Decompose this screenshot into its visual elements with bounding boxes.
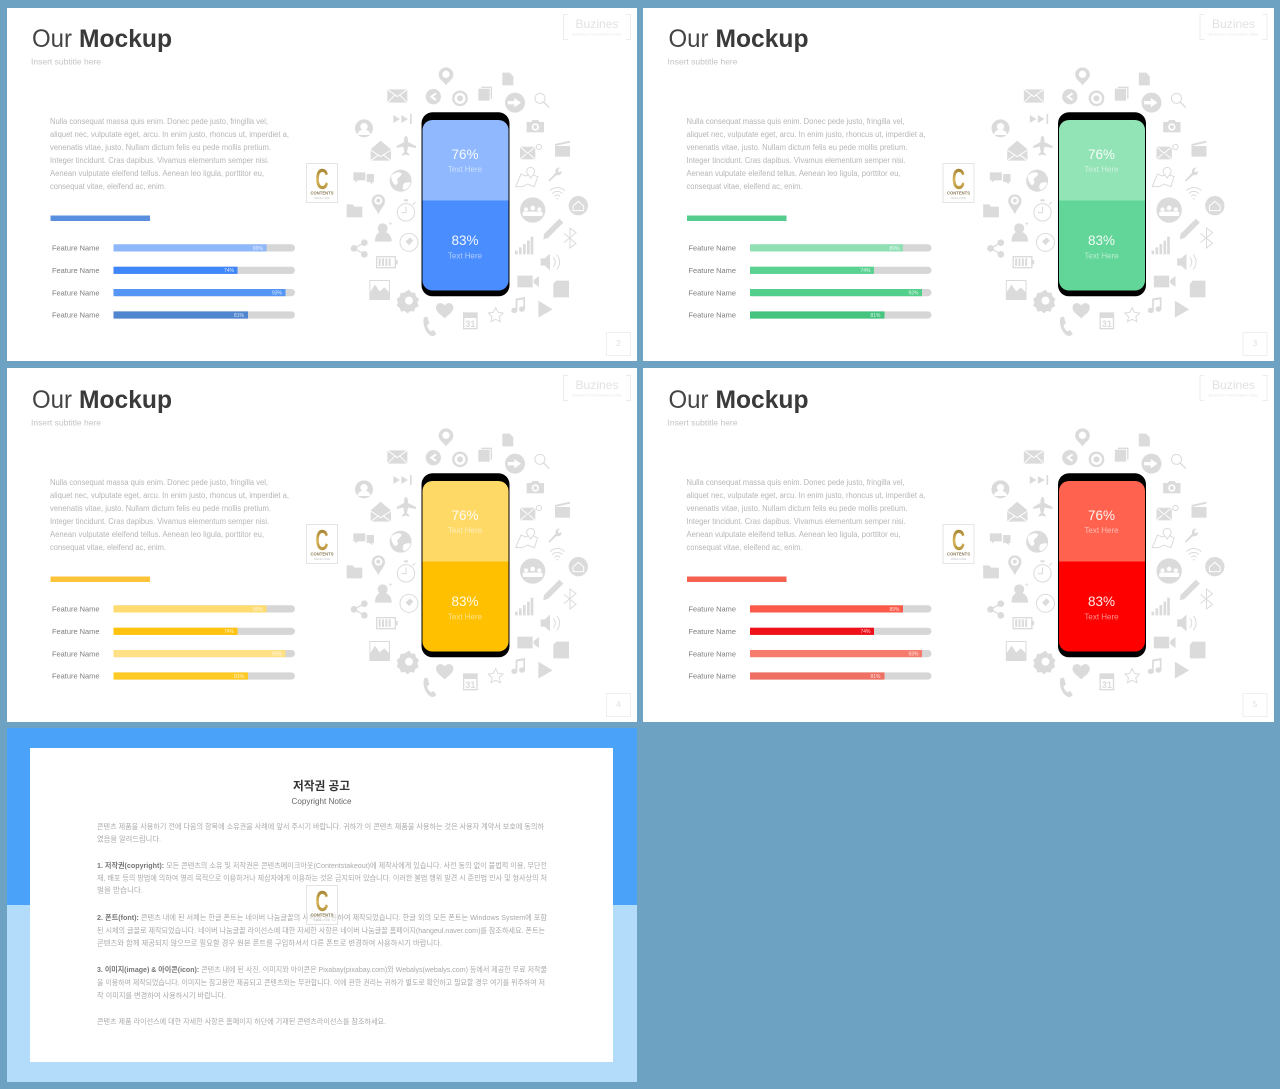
phone mockup (422, 112, 510, 296)
notice body text (97, 822, 547, 1026)
bar chart: features: Feature Name (688, 244, 736, 252)
notice body text: 였음을 알려드립니다. (97, 834, 161, 844)
phone mockup: 76% (451, 508, 479, 523)
body text: venenatis vitae, justo. Nullam dictum felis eu pede mollis pretium. (50, 143, 271, 152)
page number: 5 (1253, 700, 1258, 709)
slide heading: Our (32, 25, 72, 53)
logo (943, 524, 974, 564)
slide heading (32, 386, 172, 414)
panel: yellow mockup slide (7, 368, 637, 722)
phone mockup: Text Here (1084, 526, 1119, 535)
brand mark: Buzines (1212, 17, 1255, 31)
page number (1243, 694, 1267, 716)
brand mark: Buzines (576, 17, 618, 31)
slide heading: Our (32, 386, 72, 414)
body text: Aenean vulputate eleifend tellus. Aenean leo ligula, porttitor eu, (686, 169, 900, 178)
body text (686, 117, 926, 191)
phone mockup: 83% (451, 594, 479, 609)
bar chart: features: 74% (860, 629, 871, 635)
brand mark: Business Presentation Slide (572, 394, 622, 398)
bar chart: features: Feature Name (52, 310, 100, 320)
logo: CONTENTS (310, 190, 334, 196)
phone mockup (1058, 112, 1146, 296)
body text: aliquet nec, vulputate eget, arcu. In enim justo, rhoncus ut, imperdiet a, (50, 491, 289, 500)
bar chart: features: Feature Name (688, 672, 736, 680)
logo: C (952, 164, 965, 196)
logo: MAKE CODE (951, 196, 967, 200)
bar chart: features: 93% (272, 652, 283, 658)
slide heading (32, 25, 172, 53)
subtitle: Insert subtitle here (668, 418, 738, 428)
notice body text: 2. 폰트(font): 콘텐츠 내에 된 서체는 한글 폰트는 네이버 나눔글꼴의 서체를 사용하여 제작되었습니다. 한글 외의 모든 폰트는 Windows System에 포함 (97, 913, 547, 922)
accent bar (50, 576, 150, 582)
body text (686, 478, 926, 552)
body text: venenatis vitae, justo. Nullam dictum felis eu pede mollis pretium. (686, 504, 908, 513)
accent bar (687, 576, 786, 582)
bar chart: features: Feature Name (52, 604, 100, 614)
body text: Nulla consequat massa quis enim. Donec pede justo, fringilla vel, (686, 117, 904, 126)
icon cloud (347, 67, 588, 336)
brand mark (564, 376, 630, 400)
page number (606, 332, 630, 356)
bar chart: features: 74% (224, 268, 235, 274)
phone mockup (1058, 473, 1146, 657)
notice body text: 콘텐츠 제품 라이선스에 대한 자세한 사항은 홈페이지 하단에 기재된 콘텐츠라이선스를 참조하세요. (97, 1017, 386, 1026)
bar chart: features: 74% (224, 629, 235, 635)
slide heading: Mockup (716, 386, 808, 414)
brand mark: Business Presentation Slide (1208, 32, 1258, 36)
phone mockup: Text Here (1084, 252, 1119, 260)
brand mark: Buzines (576, 378, 618, 392)
notice body text: 된 시체의 글꼴로 제작되었습니다. 네이버 나눔글꼴 라이선스에 대한 자세한 사항은 네이버 나눔글꼴 홈페이지(hangeul.naver.com)를 참조하세요. 폰트는 (97, 926, 545, 935)
bar chart: features: Feature Name (52, 650, 100, 658)
body text: Nulla consequat massa quis enim. Donec pede justo, fringilla vel, (50, 117, 268, 126)
body text: Integer tincidunt. Cras dapibus. Vivamus elementum semper nisi. (686, 156, 906, 165)
bar chart: features (688, 244, 932, 320)
subtitle: Insert subtitle here (668, 56, 738, 66)
page number: 4 (616, 700, 621, 709)
body text: consequat vitae, eleifend ac, enim. (686, 182, 802, 191)
bar chart: features: 81% (234, 313, 245, 319)
icon cloud (983, 428, 1224, 697)
slide heading: Mockup (79, 25, 172, 53)
logo (306, 886, 338, 924)
body text: Aenean vulputate eleifend tellus. Aenean leo ligula, porttitor eu, (50, 169, 264, 178)
bar chart: features: 89% (889, 607, 900, 613)
body text (50, 117, 289, 191)
bar chart: features: 81% (870, 674, 881, 680)
page number: 3 (1253, 339, 1258, 348)
bar chart: features: 89% (253, 607, 264, 613)
body text: aliquet nec, vulputate eget, arcu. In enim justo, rhoncus ut, imperdiet a, (686, 130, 926, 139)
phone mockup: 83% (1088, 594, 1115, 609)
slide heading: Our (668, 386, 708, 414)
bar chart: features: Feature Name (688, 310, 736, 320)
body text: Aenean vulputate eleifend tellus. Aenean leo ligula, porttitor eu, (50, 530, 264, 539)
icon cloud (347, 428, 588, 697)
notice body text: 3. 이미지(image) & 아이콘(icon): 콘텐츠 내에 된 사진, 이미지와 아이콘은 Pixabay(pixabay.com)와 Webalys(webalys.com) 등에서 제공한 무료 저작물 (97, 965, 547, 974)
bar chart: features: Feature Name (688, 266, 736, 275)
bar chart: features: Feature Name (688, 604, 736, 614)
bar chart: features: 89% (889, 246, 900, 252)
bar chart: features: 93% (908, 652, 919, 658)
body text: Aenean vulputate eleifend tellus. Aenean leo ligula, porttitor eu, (686, 530, 900, 539)
body text: Nulla consequat massa quis enim. Donec pede justo, fringilla vel, (50, 478, 268, 487)
brand mark: Business Presentation Slide (572, 32, 622, 36)
bar chart: features: 81% (234, 674, 245, 680)
brand mark (564, 14, 630, 40)
logo: MAKE CODE (314, 196, 330, 200)
logo (306, 164, 338, 202)
bar chart: features: Feature Name (52, 266, 100, 275)
body text: aliquet nec, vulputate eget, arcu. In enim justo, rhoncus ut, imperdiet a, (50, 130, 289, 139)
notice body text: 재, 배포 등의 방법에 의하여 영리 목적으로 이용하거나 제삼자에게 이용하는 것은 금지되어 있습니다. 이러한 불법 행위 발견 시 준민법 민사 및 형사상의 처 (97, 874, 547, 882)
bar chart: features: 81% (870, 313, 881, 319)
bar chart: features: Feature Name (688, 650, 736, 658)
bar chart: features (688, 604, 932, 680)
accent bar (687, 216, 786, 221)
body text: venenatis vitae, justo. Nullam dictum felis eu pede mollis pretium. (50, 504, 271, 513)
logo: C (316, 525, 329, 557)
panel: red mockup slide (643, 368, 1274, 722)
phone mockup: 76% (1088, 147, 1115, 162)
body text: consequat vitae, eleifend ac, enim. (50, 543, 166, 552)
bar chart: features: 93% (908, 290, 919, 296)
slide heading (668, 386, 808, 414)
bar chart: features: Feature Name (688, 288, 736, 298)
body text: Nulla consequat massa quis enim. Donec pede justo, fringilla vel, (686, 478, 904, 487)
bar chart: features: 74% (860, 268, 871, 274)
bar chart: features: Feature Name (52, 244, 100, 252)
bar chart: features: Feature Name (52, 288, 100, 298)
notice body text: 콘텐츠와 함께 제공되지 않으므로 필요할 경우 원본 폰트를 구입하셔서 다른 폰트로 변경하여 사용하시기 바랍니다. (97, 938, 442, 948)
notice body text: 콘텐츠 제품을 사용하기 전에 다음의 항목에 소유권을 사례에 앞서 주시기 바랍니다. 귀하가 이 콘텐츠 제품을 사용하는 것은 사용자 계약서 보호에 동의하 (97, 822, 544, 831)
body text: consequat vitae, eleifend ac, enim. (50, 182, 166, 191)
brand mark: Buzines (1212, 378, 1255, 392)
bar chart: features: 93% (272, 290, 283, 296)
logo: C (316, 164, 329, 196)
phone mockup: Text Here (1084, 165, 1119, 174)
phone mockup: Text Here (1084, 612, 1119, 622)
slide heading: Mockup (79, 386, 172, 414)
body text: venenatis vitae, justo. Nullam dictum felis eu pede mollis pretium. (686, 143, 908, 152)
panel: copyright notice slide (7, 728, 637, 1082)
notice body text: 작 이미지를 변경하여 사용하시기 바랍니다. (97, 991, 226, 1000)
bar chart: features (52, 244, 295, 320)
logo (306, 524, 338, 564)
notice body text: 1. 저작권(copyright): 모든 콘텐츠의 소유 및 저작권은 콘텐츠메이크아웃(Contentstakeout)에 제작사에게 있습니다. 사전 동의 없이 불법적 이용, 무단전 (97, 861, 547, 870)
icon cloud (983, 67, 1224, 336)
logo: CONTENTS (310, 552, 334, 556)
notice body text: 을 이용하여 제작되었습니다. 이미지는 참고용만 제공되고 콘텐츠와는 무관합니다. 이에 관한 권리는 귀하가 별도로 확인하고 필요할 경우 여기를 위주하여 저 (97, 978, 545, 987)
logo: MAKE CODE (314, 557, 330, 561)
phone mockup: 83% (1088, 233, 1115, 248)
brand mark (1200, 376, 1267, 400)
body text: Integer tincidunt. Cras dapibus. Vivamus elementum semper nisi. (50, 517, 269, 526)
phone mockup: 76% (1088, 508, 1115, 523)
brand mark (1200, 14, 1267, 40)
logo: C (952, 525, 965, 557)
page number (1243, 332, 1267, 356)
body text: Integer tincidunt. Cras dapibus. Vivamus elementum semper nisi. (686, 517, 906, 526)
phone mockup: Text Here (448, 252, 483, 260)
phone mockup: Text Here (448, 526, 483, 535)
bar chart: features: Feature Name (688, 627, 736, 636)
panel: green mockup slide (643, 8, 1274, 361)
phone mockup: Text Here (448, 612, 483, 622)
body text: aliquet nec, vulputate eget, arcu. In enim justo, rhoncus ut, imperdiet a, (686, 491, 926, 500)
bar chart: features (52, 604, 295, 680)
logo: CONTENTS (947, 552, 970, 556)
subtitle: Insert subtitle here (31, 418, 101, 428)
logo: C (316, 886, 329, 918)
logo: CONTENTS (310, 912, 334, 918)
page number (606, 694, 630, 716)
phone mockup (422, 473, 510, 657)
bar chart: features: Feature Name (52, 672, 100, 680)
subtitle: Insert subtitle here (31, 56, 101, 66)
panel: blue mockup slide (7, 8, 637, 361)
slide heading: Our (668, 25, 708, 53)
brand mark: Business Presentation Slide (1208, 394, 1258, 398)
logo (943, 164, 974, 202)
body text: Integer tincidunt. Cras dapibus. Vivamus elementum semper nisi. (50, 156, 269, 165)
logo: MAKE CODE (951, 557, 967, 561)
slide heading (668, 25, 808, 53)
notice body text: 벌을 받습니다. (97, 886, 143, 894)
body text: consequat vitae, eleifend ac, enim. (686, 543, 802, 552)
phone mockup: 83% (451, 233, 479, 248)
page number: 2 (616, 339, 621, 348)
accent bar (50, 216, 150, 221)
slide heading: Mockup (716, 25, 808, 53)
bar chart: features: 89% (253, 246, 264, 252)
phone mockup: 76% (451, 147, 479, 162)
notice subheading: Copyright Notice (292, 797, 352, 806)
phone mockup: Text Here (448, 165, 483, 174)
notice heading: 저작권 공고 (293, 778, 350, 793)
bar chart: features: Feature Name (52, 627, 100, 636)
body text (50, 478, 289, 552)
logo: MAKE CODE (314, 918, 330, 922)
logo: CONTENTS (947, 190, 970, 196)
